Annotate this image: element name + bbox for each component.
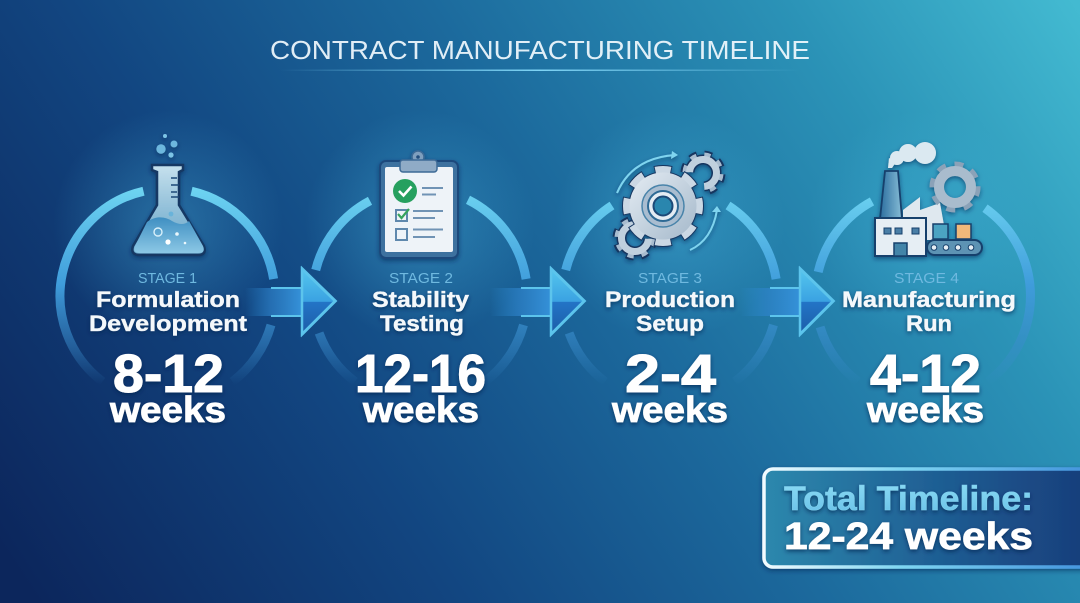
stage 3 name: Setup bbox=[636, 311, 704, 336]
icon: gears bbox=[617, 151, 721, 256]
stage 2 name: Testing bbox=[380, 311, 464, 336]
gear bbox=[934, 166, 976, 208]
title: CONTRACT MANUFACTURING TIMELINE bbox=[270, 35, 810, 65]
back building bbox=[903, 197, 944, 240]
stage 4 duration bbox=[866, 344, 984, 430]
conveyor bbox=[927, 240, 982, 255]
stage 4 name: Manufacturing bbox=[842, 287, 1016, 312]
panel: stage 1 bbox=[53, 110, 283, 430]
stage 2 duration: 12-16 bbox=[355, 344, 486, 404]
small gear bottom left bbox=[617, 220, 653, 256]
stage 4 duration: weeks bbox=[866, 389, 984, 430]
smoke bbox=[888, 142, 936, 168]
stage 2 name bbox=[372, 287, 470, 336]
stage 1 duration: weeks bbox=[109, 389, 226, 430]
stage 2 name: Stability bbox=[372, 287, 470, 312]
stage 1 name bbox=[89, 287, 248, 336]
stage 4 label: STAGE 4 bbox=[894, 270, 959, 287]
arrow: stage 2 to 3 bbox=[490, 268, 585, 335]
stage 3 duration bbox=[611, 344, 728, 430]
callout: total timeline: Total Timeline: bbox=[784, 480, 1033, 518]
rotation arrows bbox=[617, 151, 721, 250]
stage 1 duration bbox=[109, 344, 226, 430]
chimney bbox=[880, 171, 902, 219]
panel: stage 2 bbox=[305, 110, 535, 430]
stage 3 duration: 2-4 bbox=[625, 344, 716, 404]
stage 4 name bbox=[842, 287, 1016, 336]
ring: stage 2 bbox=[316, 200, 526, 382]
main gear bbox=[627, 170, 699, 242]
small gear top right bbox=[685, 155, 721, 191]
callout: total timeline: 12-24 weeks bbox=[784, 516, 1033, 558]
stage 1 name: Development bbox=[89, 311, 248, 336]
panel: stage 4 bbox=[808, 110, 1038, 430]
ring: stage 4 bbox=[818, 201, 1030, 382]
panel: stage 3 bbox=[555, 110, 785, 430]
main building bbox=[875, 218, 926, 256]
stage 2 duration: weeks bbox=[362, 389, 479, 430]
stage 1 label: STAGE 1 bbox=[138, 270, 197, 287]
stage 4 name: Run bbox=[906, 311, 952, 336]
ring: stage 3 bbox=[566, 206, 776, 382]
stage 4 duration: 4-12 bbox=[870, 344, 981, 404]
stage 2 label: STAGE 2 bbox=[389, 270, 453, 287]
stage 2 duration bbox=[355, 344, 486, 430]
stage 1 duration: 8-12 bbox=[113, 344, 224, 404]
arrow: stage 1 to 2 bbox=[245, 268, 336, 335]
stage 1 name: Formulation bbox=[96, 287, 240, 312]
icon: clipboard bbox=[380, 151, 458, 258]
boxes bbox=[933, 224, 948, 239]
stage 3 name bbox=[605, 287, 735, 336]
arrow: stage 3 to 4 bbox=[740, 268, 834, 335]
callout: total timeline bbox=[764, 469, 1080, 567]
icon: flask bbox=[132, 134, 205, 255]
stage 3 duration: weeks bbox=[611, 389, 728, 430]
stage 3 label: STAGE 3 bbox=[638, 270, 702, 287]
stage 3 name: Production bbox=[605, 287, 735, 312]
icon: factory bbox=[875, 142, 982, 256]
ring: stage 1 bbox=[60, 191, 274, 382]
